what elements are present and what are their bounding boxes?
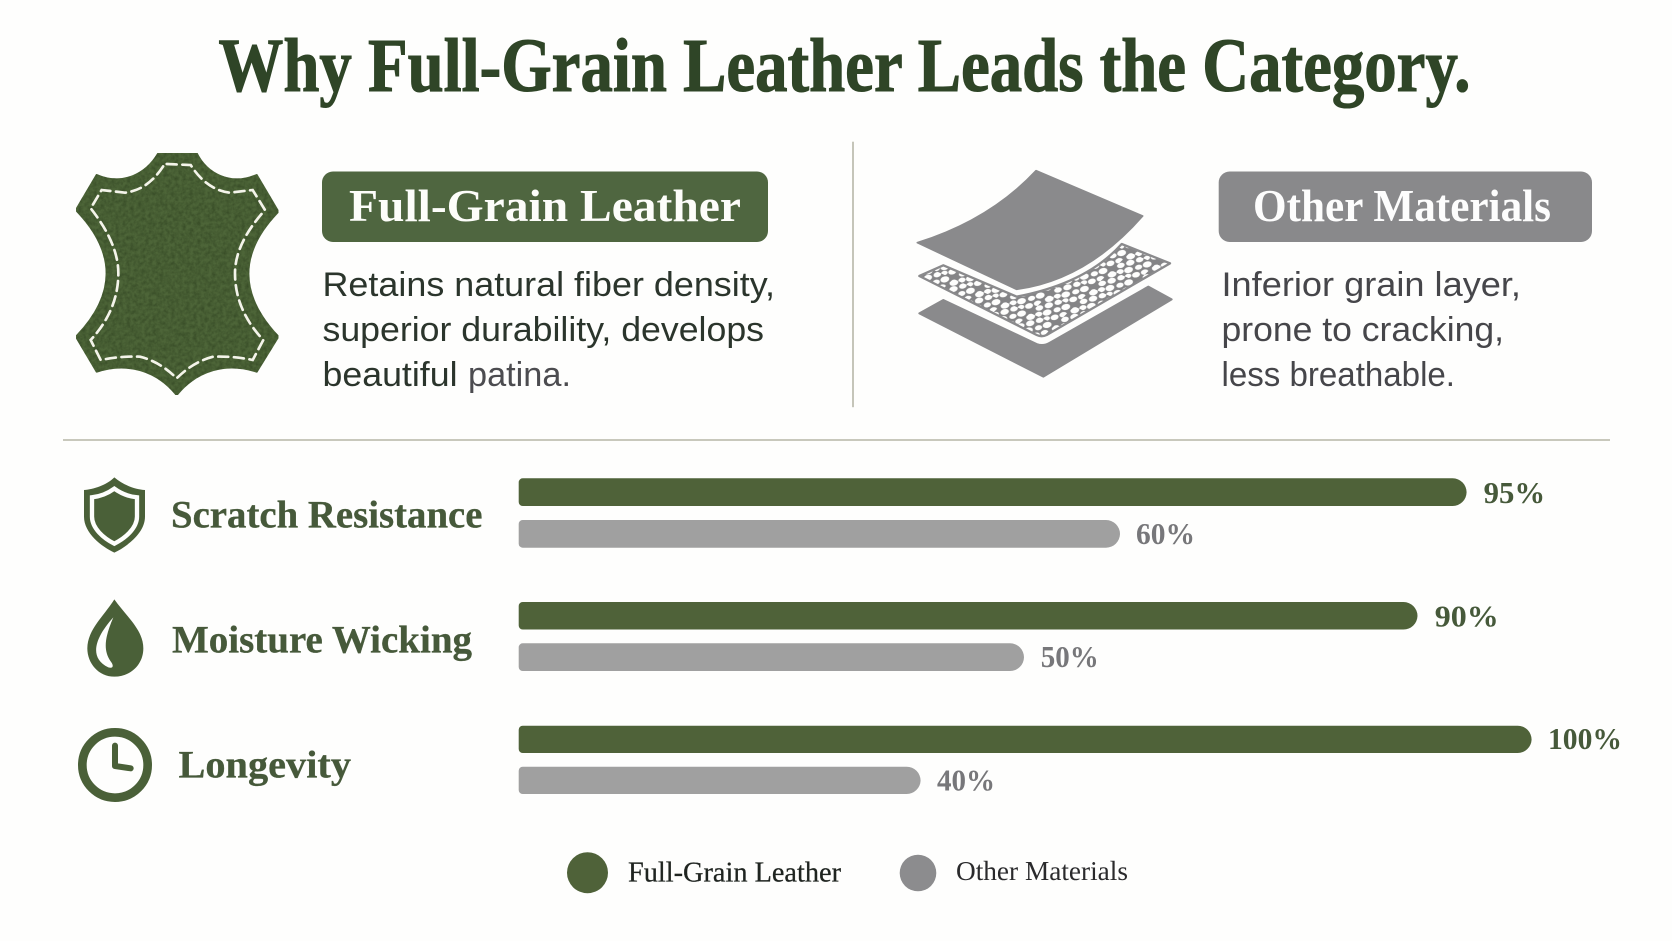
badge: other materials [1219,172,1592,242]
description: full-grain leather: beautiful [322,356,458,394]
legend [567,852,1128,893]
legend label: full-grain leather: Full-Grain Leather [628,858,842,889]
row: longevity [82,721,1622,798]
bar: other 60% [519,520,1120,548]
badge: other materials: Other Materials [1253,180,1551,231]
label: moisture wicking: Moisture Wicking [172,618,472,661]
label: scratch resistance: Scratch Resistance [171,494,482,537]
value: 100%: 100% [1548,721,1622,756]
panel: other materials [917,171,1592,394]
description: other materials [1222,266,1521,394]
icon: leather hide with stitching [76,153,278,395]
label: longevity: Longevity [178,743,352,786]
value: 60%: 60% [1136,516,1195,551]
bar: full-grain 90% [519,602,1418,630]
value: 90%: 90% [1435,599,1499,634]
legend label: other materials: Other Materials [956,856,1128,886]
description: full-grain leather: Retains natural fiber density, [322,266,775,304]
value: 95%: 95% [1484,475,1545,510]
description: other materials: less breathable. [1222,356,1455,394]
bar: full-grain 95% [519,478,1467,506]
icon: shield [84,477,145,553]
title: Why Full-Grain Leather Leads the Category. [218,24,1470,108]
badge: full-grain leather: Full-Grain Leather [349,180,741,231]
icon: clock [82,732,148,798]
bar: other 40% [519,767,921,794]
description: other materials: Inferior grain layer, [1222,266,1521,304]
bar: other 50% [519,643,1024,671]
value: 50%: 50% [1041,639,1099,674]
value: 40%: 40% [937,763,995,798]
legend swatch: full-grain leather [567,852,608,893]
row: scratch resistance [84,475,1545,553]
badge: full-grain leather [322,172,768,242]
description: other materials: prone to cracking, [1222,311,1504,349]
bar: full-grain 100% [519,726,1532,753]
description: full-grain leather: patina. [468,356,571,394]
legend swatch: other materials [900,855,936,891]
panel: full-grain leather [76,153,775,395]
icon: layered materials [917,171,1172,377]
description: full-grain leather [322,266,775,394]
description: full-grain leather: superior durability, develops [322,311,764,349]
icon: water drop [87,599,143,677]
row: moisture wicking [87,599,1499,677]
